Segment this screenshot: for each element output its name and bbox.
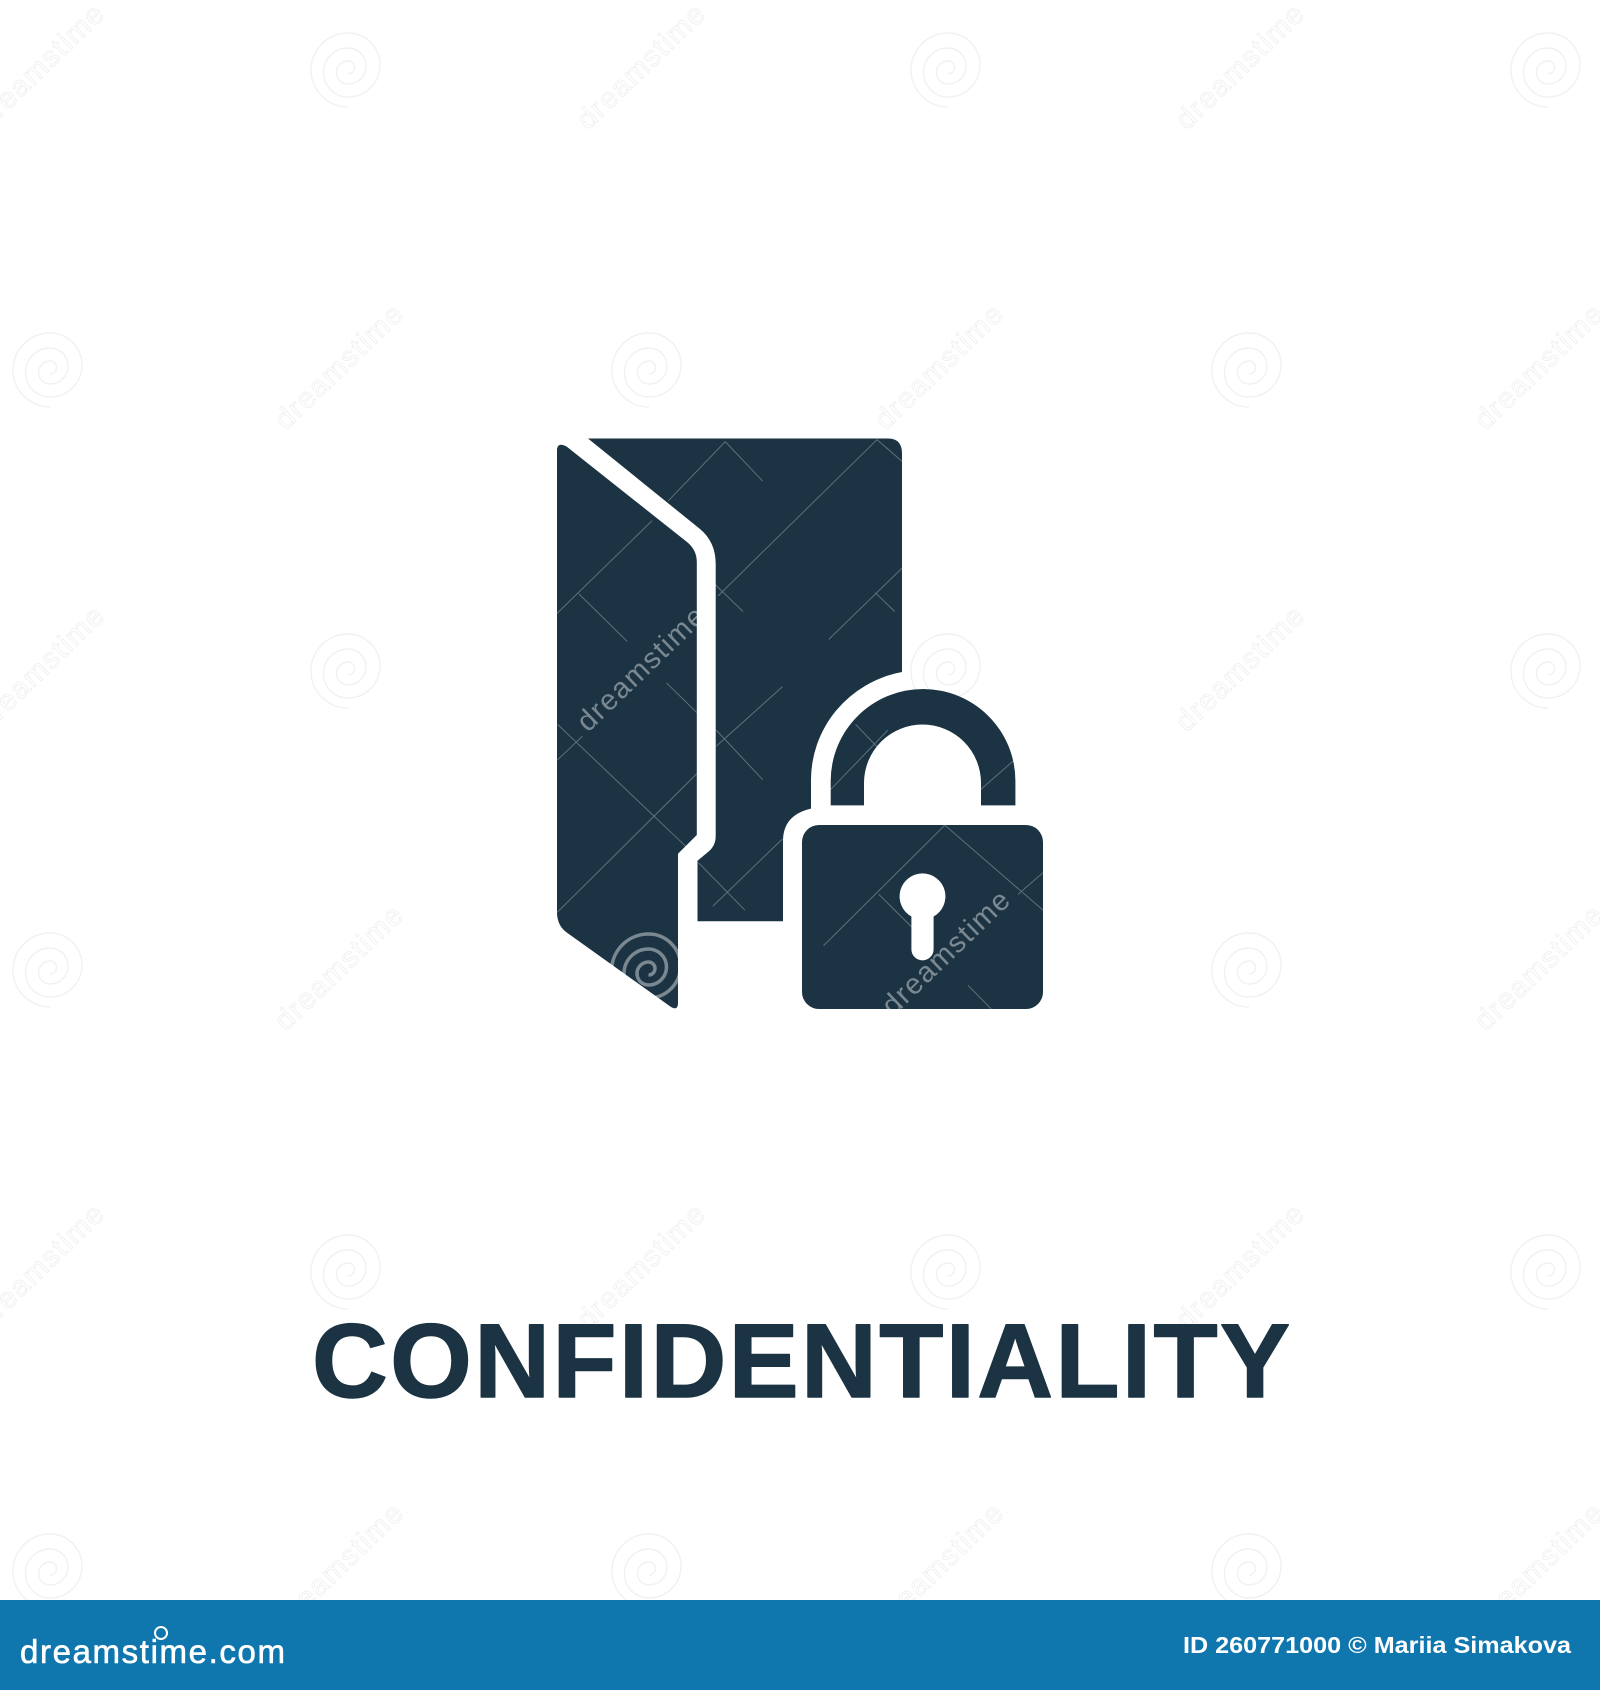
watermark pattern: dreamstime [571,1197,713,1336]
title: CONFIDENTIALITY [312,1303,1290,1420]
footer banner [0,1600,1600,1690]
watermark pattern: dreamstime [269,898,411,1037]
watermark pattern: dreamstime [869,1496,1011,1635]
watermark pattern: dreamstime [269,297,411,436]
watermark pattern: dreamstime [269,1496,411,1635]
watermark overlay on icon: dreamstime [571,599,713,738]
banner logo: dreamstime.com [20,1633,285,1670]
watermark pattern: dreamstime [571,0,713,136]
watermark overlay on icon: dreamstime [876,883,1018,1022]
watermark pattern: dreamstime [1170,0,1312,136]
icon: padlock shackle [831,689,1015,805]
icon: keyhole [900,873,945,960]
watermark pattern: dreamstime [1170,1197,1312,1336]
icon: folder back panel [588,438,902,921]
icon: padlock body [802,825,1043,1009]
watermark pattern: dreamstime [1170,599,1312,738]
watermark overlay on icon [557,440,1043,1022]
watermark pattern: dreamstime [869,297,1011,436]
icon: folder front leaf [557,445,697,1008]
icon: folder with padlock [557,438,1043,1022]
banner credit: ID 260771000 © Mariia Simakova [1183,1632,1571,1658]
